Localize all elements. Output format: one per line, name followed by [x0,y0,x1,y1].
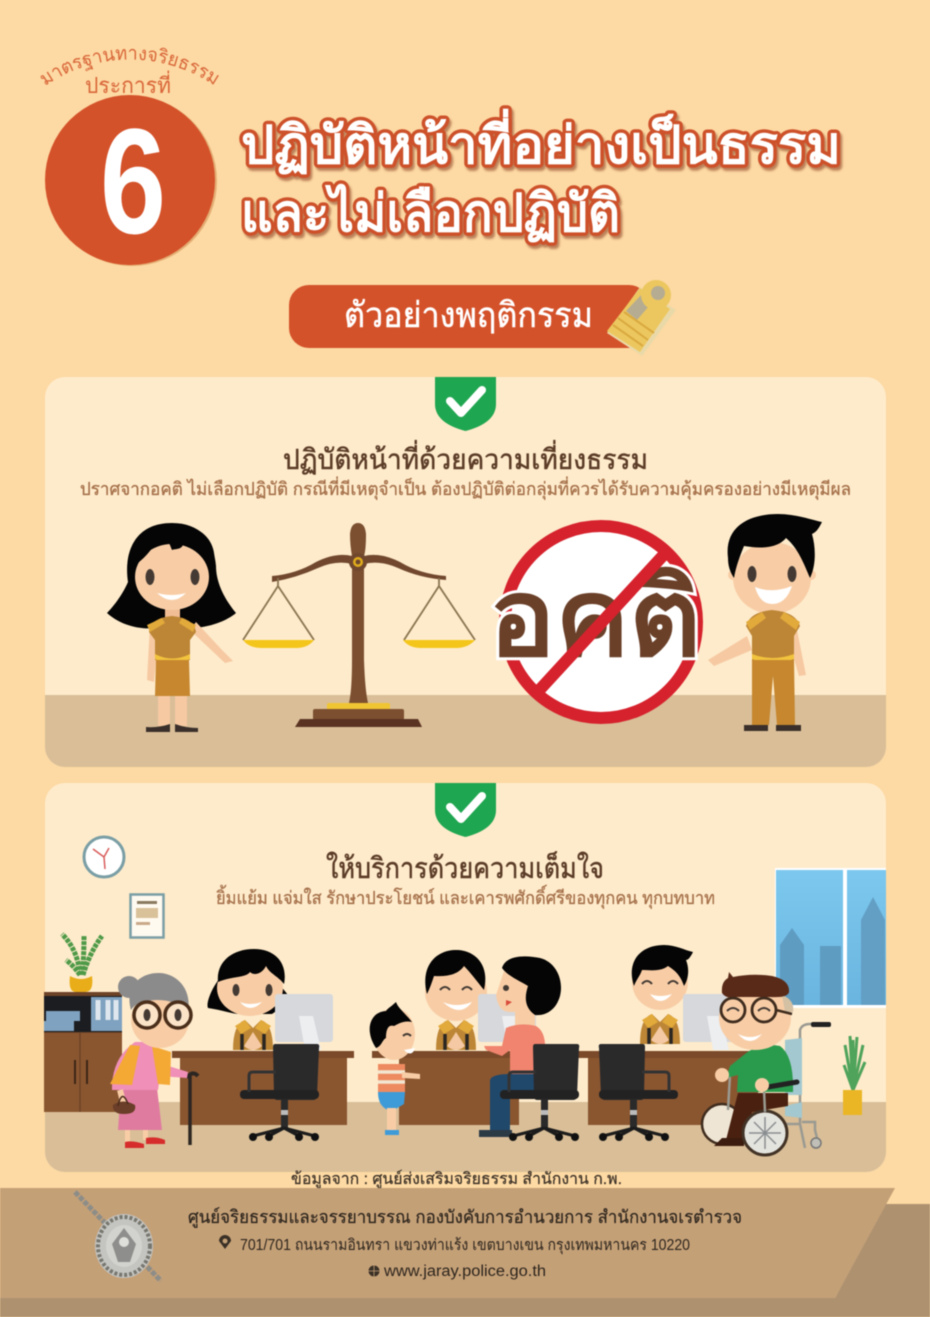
officer 3 monitor [683,994,741,1050]
chair 1 [240,1044,319,1141]
officer 1 monitor [275,994,333,1050]
elderly man in wheelchair [702,972,831,1155]
organisation name: ศูนย์จริยธรรมและจรรยาบรรณ กองบังคับการอำนวยการ สำนักงานจเรตำรวจ [188,1207,742,1228]
prohibition slash [533,548,670,697]
filing cabinet [44,992,122,1112]
footer band [0,1188,930,1317]
panel: willing service [44,783,886,1172]
character: female officer [107,523,236,732]
website: www.jaray.police.go.th [383,1263,546,1280]
floor [45,1102,886,1172]
elderly woman with cane [110,973,198,1148]
icon: green check shield [435,783,496,837]
desk 2 [372,1051,580,1125]
floor [45,695,886,767]
child [370,1002,420,1135]
chair 2 [500,1044,579,1141]
emblem: police crest [75,1192,161,1281]
officer 2 [425,950,487,1050]
panel: fair duty [45,377,886,767]
panel heading: ปฏิบัติหน้าที่ด้วยความเที่ยงธรรม [283,440,648,475]
desk 3 [579,1051,758,1125]
customer woman seated [479,956,561,1137]
arc label: ethics standard: มาตรฐานทางจริยธรรม [40,47,220,86]
icon: balance scale [243,523,475,727]
badge: standard number 6 [40,47,220,266]
banner: behaviour examples [289,280,676,356]
officer 3 [632,945,693,1044]
panel heading: ให้บริการด้วยความเต็มใจ [326,850,604,885]
character: male officer [708,514,822,731]
number circle [47,96,217,266]
desk 1 [172,1051,354,1125]
title line 1: ปฏิบัติหน้าที่อย่างเป็นธรรม [241,109,841,175]
right floor plant [843,1036,865,1115]
panel description: ยิ้มแย้ม แจ่มใส รักษาประโยชน์ และเคารพศักดิ์ศรีของทุกคน ทุกบทบาท [216,884,715,909]
icon: wall clock [84,837,124,877]
icon: location pin [219,1235,231,1249]
address: 701/701 ถนนรามอินทรา แขวงท่าแร้ง เขตบางเขน กรุงเทพมหานคร 10220 [240,1237,690,1255]
main title [241,109,841,243]
label: article: ประการที่ [85,70,171,98]
icon: globe [368,1266,380,1276]
source credit: ข้อมูลจาก : ศูนย์ส่งเสริมจริยธรรม สำนักงาน ก.พ. [291,1169,622,1189]
icon: green check shield [435,377,496,431]
potted plant on cabinet [62,934,102,992]
panel description: ปราศจากอคติ ไม่เลือกปฏิบัติ กรณีที่มีเหตุจำเป็น ต้องปฏิบัติต่อกลุ่มที่ควรได้รับความคุ้มครองอย่างมีเหตุมีผล [80,476,851,500]
icon: no-bias prohibition sign [489,526,701,718]
officer 2 monitor [478,994,536,1050]
icon: rank epaulette [607,280,676,356]
window with city view [775,868,886,1008]
title line 2: และไม่เลือกปฏิบัติ [241,183,620,243]
number 6: 6 [100,97,166,265]
word: bias: อคติ [489,557,701,678]
banner text: ตัวอย่างพฤติกรรม [344,296,593,335]
officer 1 [208,949,292,1050]
chair 3 [599,1044,678,1141]
certificate frame [130,894,164,938]
